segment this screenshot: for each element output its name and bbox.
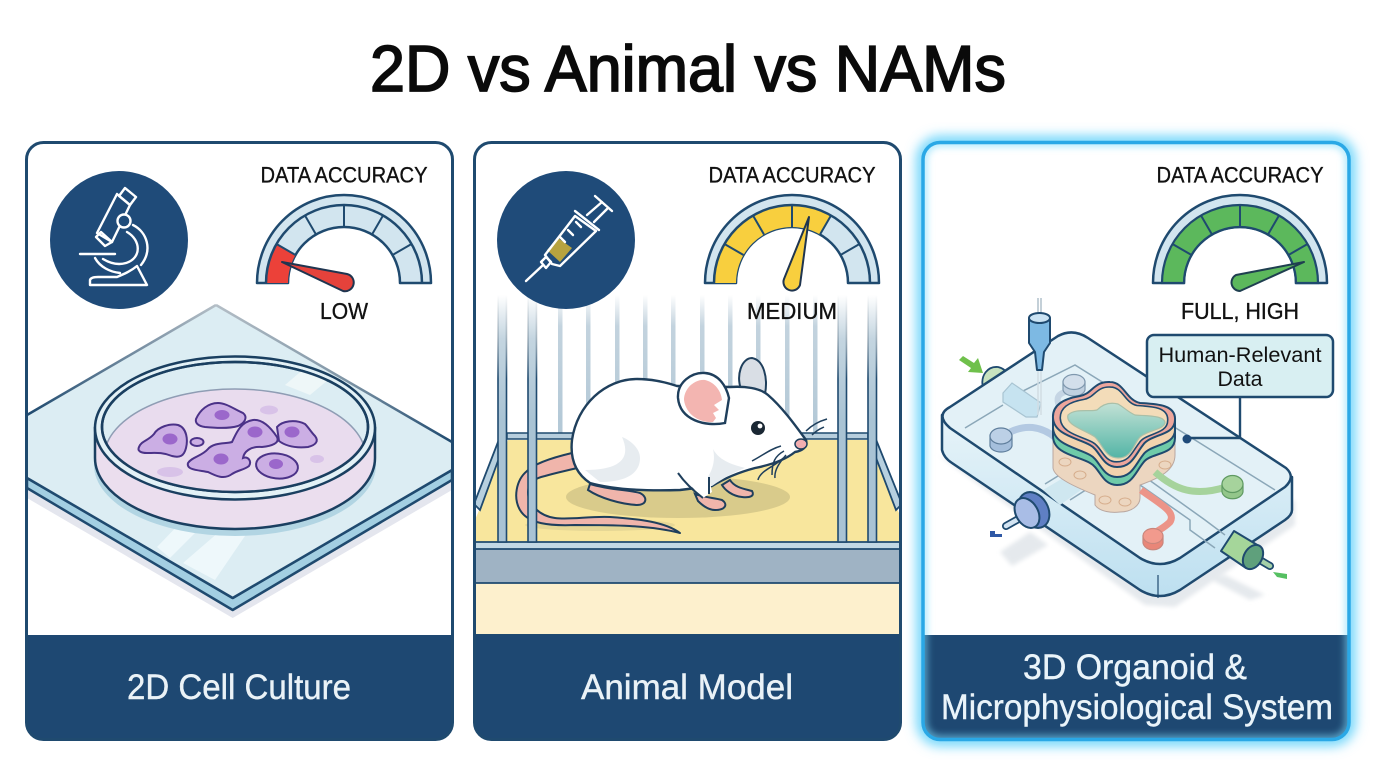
chip body <box>942 415 1292 596</box>
panel: 2D cell culture <box>26 142 453 740</box>
green inlet arrow <box>959 356 983 373</box>
title: 2D vs Animal vs NAMs <box>370 32 1006 105</box>
gauge: full high accuracy <box>1153 195 1327 291</box>
label: medium: MEDIUM <box>747 298 837 324</box>
tail <box>516 453 680 533</box>
cells <box>138 403 324 481</box>
label: low: LOW <box>320 298 368 324</box>
channels <box>965 365 1275 500</box>
green right port <box>1221 531 1287 579</box>
chip shadows <box>938 455 1295 607</box>
illustration: mouse in cage <box>474 295 902 636</box>
whiskers <box>752 419 827 480</box>
blue left port <box>990 487 1056 537</box>
callout: human-relevant data <box>1147 335 1333 444</box>
feet <box>588 484 645 505</box>
gauge: medium accuracy <box>705 195 879 291</box>
body <box>572 379 806 490</box>
label: data accuracy: DATA ACCURACY <box>260 162 428 188</box>
left inlet port <box>982 367 1006 388</box>
footer: 3D organoid <box>923 635 1349 740</box>
organoid <box>1053 382 1175 512</box>
label: data accuracy: DATA ACCURACY <box>708 162 876 188</box>
footer text: line 1: 3D Organoid & <box>1023 648 1247 687</box>
footer text: 2D Cell Culture <box>127 668 351 707</box>
icon: microscope <box>50 171 188 309</box>
front leg <box>692 477 712 498</box>
floor shadow <box>566 476 790 518</box>
right ear <box>739 358 766 394</box>
illustration: petri dish on glass plate <box>27 305 452 618</box>
callout: human-relevant data: Data <box>1218 368 1263 391</box>
panel: 3D organoid and microphysiological system <box>923 142 1349 740</box>
panel: animal model <box>474 142 902 740</box>
label: full, high: FULL, HIGH <box>1181 298 1299 324</box>
left ear <box>678 373 729 424</box>
footer text: line 2: Microphysiological System <box>941 688 1333 727</box>
needle <box>1029 298 1050 415</box>
nose <box>795 439 807 449</box>
green and red reservoirs <box>1141 472 1243 550</box>
gauge: low accuracy <box>257 195 431 291</box>
icon: syringe <box>497 171 635 309</box>
footer text: Animal Model <box>581 668 793 707</box>
footer: 2D cell culture <box>26 635 453 740</box>
illustration: organ-on-chip <box>938 298 1333 607</box>
footer: animal model <box>474 635 901 740</box>
label: data accuracy: DATA ACCURACY <box>1156 162 1324 188</box>
blue and grey reservoirs <box>990 374 1085 452</box>
callout: human-relevant data: Human-Relevant <box>1158 344 1322 367</box>
cage posts <box>498 295 876 542</box>
chip top <box>942 332 1291 564</box>
eye <box>751 421 765 435</box>
